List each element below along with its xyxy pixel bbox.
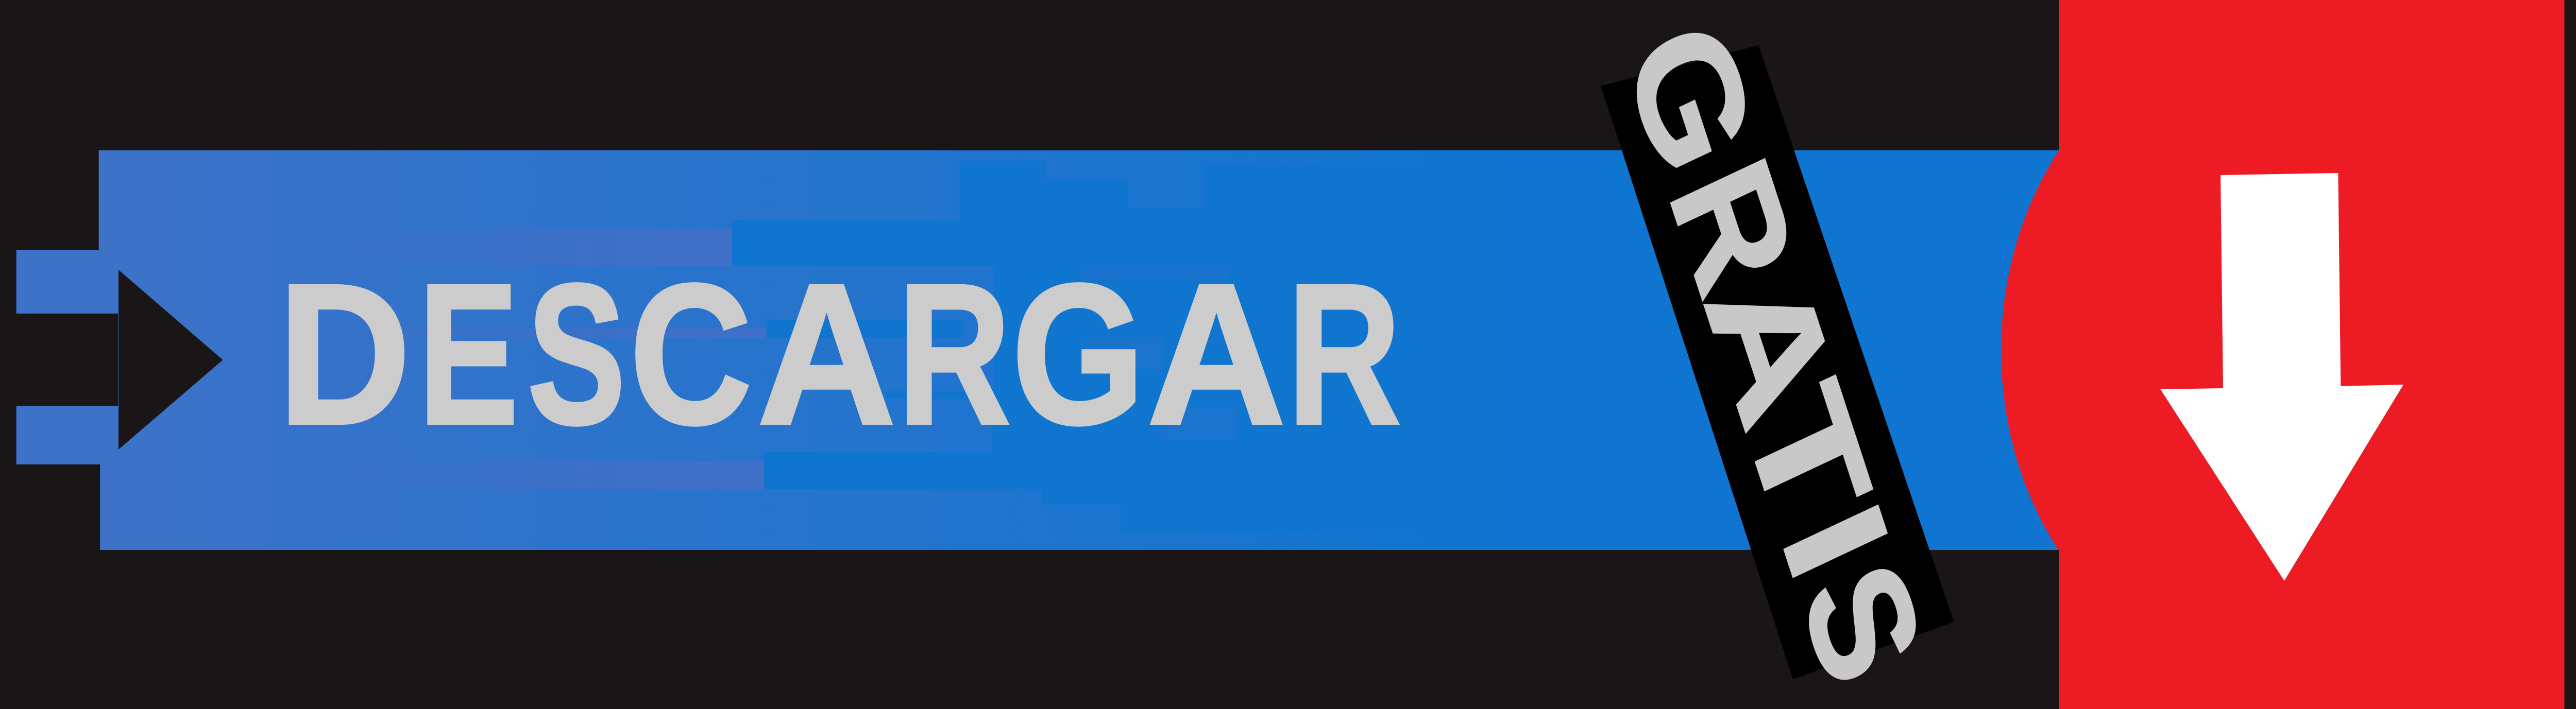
ribbon label: GRATIS: R: [1638, 135, 1826, 317]
heading: DESCARGAR: E: [418, 243, 518, 466]
red download panel: [2001, 0, 2565, 709]
left arrow icon: [118, 270, 223, 449]
heading: DESCARGAR: D: [278, 243, 411, 466]
icon: white download arrow: [2160, 173, 2403, 581]
ribbon label: GRATIS: G: [1594, 0, 1788, 198]
heading: DESCARGAR: R: [1287, 243, 1401, 466]
heading: DESCARGAR: [278, 243, 1401, 466]
heading: DESCARGAR: S: [528, 243, 625, 466]
blue banner band with tabs: [16, 150, 2061, 550]
heading: DESCARGAR: R: [897, 243, 1010, 466]
diagonal black ribbon: [1601, 45, 1954, 679]
ribbon label: GRATIS: [1594, 0, 1954, 708]
heading: DESCARGAR: A: [757, 243, 896, 466]
heading: DESCARGAR: G: [1012, 243, 1145, 466]
ribbon label: GRATIS: T: [1712, 360, 1902, 548]
heading: DESCARGAR: A: [1147, 243, 1285, 466]
ribbon label: GRATIS: I: [1751, 479, 1920, 603]
heading: DESCARGAR: C: [630, 243, 752, 466]
banner tonal blocks: [283, 161, 1503, 533]
ribbon label: GRATIS: A: [1674, 243, 1870, 451]
ribbon label: GRATIS: S: [1770, 538, 1954, 708]
